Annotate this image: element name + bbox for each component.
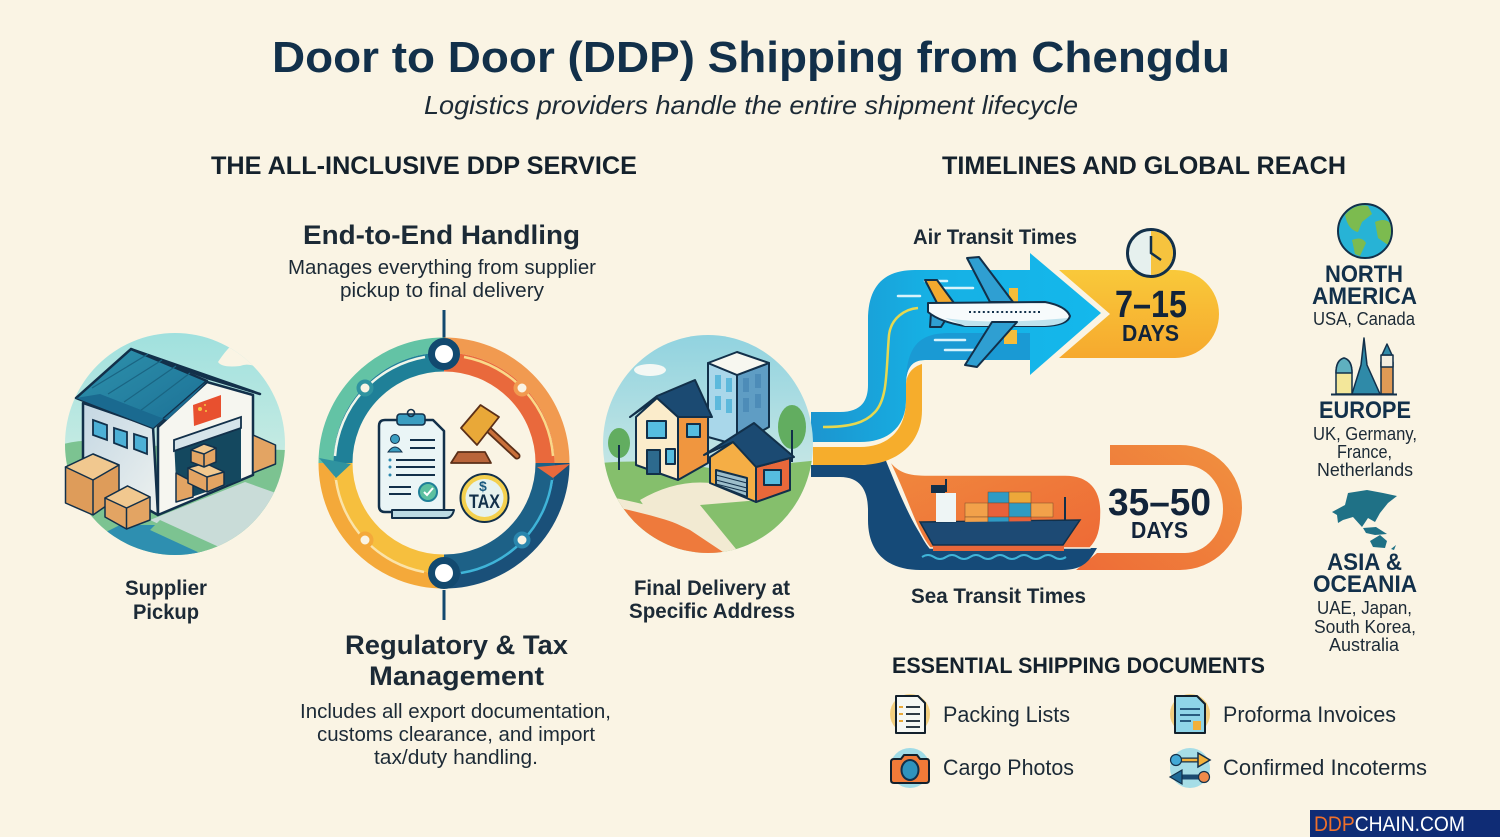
roof [76, 349, 207, 428]
flow ribbon: sea route and C-shaped pill [811, 445, 1242, 570]
icon: tax coin: TAX [469, 492, 500, 513]
document item: confirmed incoterms: Confirmed Incoterms [1223, 755, 1427, 780]
small house with garage [704, 423, 794, 502]
region: north america [1312, 261, 1417, 329]
label: supplier pickup: Pickup [133, 601, 199, 624]
tower [708, 352, 769, 445]
text block: regulatory and tax management [300, 630, 611, 769]
heading: timelines and reach: TIMELINES AND GLOBAL REACH [942, 152, 1346, 180]
region: asia and oceania: South Korea, [1314, 617, 1416, 637]
icon: airplane [925, 257, 1070, 367]
text block: regulatory and tax management: Management [369, 661, 544, 691]
region: europe: Netherlands [1317, 460, 1413, 480]
days pill: air: 7–15 [1115, 284, 1187, 326]
icon: globe [1338, 204, 1395, 258]
region: north america: USA, Canada [1313, 309, 1416, 329]
icon: european landmarks [1331, 338, 1397, 394]
text block: regulatory and tax management: customs clearance, and import [317, 724, 595, 746]
brand badge: DDPCHAIN.COM [1314, 813, 1465, 836]
document item: cargo photos: Cargo Photos [943, 755, 1074, 780]
title: Door to Door (DDP) Shipping from Chengdu [272, 33, 1230, 82]
region: europe: UK, Germany, [1313, 424, 1417, 444]
text block: regulatory and tax management: Regulatory & Tax [345, 630, 568, 660]
text block: end-to-end handling: End-to-End Handling [303, 220, 580, 250]
text block: regulatory and tax management: Includes all export documentation, [300, 701, 611, 723]
icon: warehouse at supplier [64, 333, 285, 555]
text block: end-to-end handling: pickup to final delivery [340, 280, 544, 302]
trees [608, 428, 630, 458]
region: asia and oceania [1313, 549, 1417, 655]
label: final delivery: Final Delivery at [634, 577, 790, 600]
region: europe [1313, 397, 1417, 480]
text block: end-to-end handling: Manages everything from supplier [288, 257, 596, 279]
days pill: air [1059, 270, 1219, 358]
region: asia and oceania: Australia [1329, 635, 1400, 655]
label: supplier pickup: Supplier [125, 577, 207, 600]
subtitle: Logistics providers handle the entire shipment lifecycle [424, 90, 1078, 120]
label: supplier pickup [125, 577, 207, 624]
region: asia and oceania: OCEANIA [1313, 571, 1417, 598]
document item: proforma invoices: Proforma Invoices [1223, 702, 1396, 727]
days label: sea: DAYS [1131, 517, 1188, 543]
region: asia and oceania: UAE, Japan, [1317, 598, 1412, 618]
icon: gavel [451, 405, 517, 463]
icon: container ship [920, 479, 1080, 559]
label: final delivery: Specific Address [629, 600, 795, 623]
flow ribbon: yellow connector [813, 364, 922, 465]
document item: packing lists: Packing Lists [943, 702, 1070, 727]
region: europe: France, [1337, 442, 1392, 462]
region: north america: AMERICA [1312, 283, 1417, 310]
text block: end-to-end handling [288, 220, 596, 302]
document item: cargo photos [890, 748, 1074, 788]
label: final delivery [629, 577, 795, 623]
warehouse walls [83, 403, 158, 515]
circular process ring [319, 310, 570, 620]
days label: sea [1108, 482, 1211, 543]
label: air transit: Air Transit Times [913, 226, 1077, 249]
label: sea transit: Sea Transit Times [911, 585, 1086, 608]
icon: houses at final delivery [600, 330, 820, 560]
region: europe: EUROPE [1319, 397, 1411, 424]
document item: proforma invoices [1170, 694, 1396, 734]
days pill: air: DAYS [1122, 320, 1179, 346]
document item: confirmed incoterms [1170, 748, 1427, 788]
text block: regulatory and tax management: tax/duty handling. [374, 747, 538, 769]
flag [193, 395, 221, 426]
icon: tax coin [460, 474, 508, 522]
flow ribbon: air route arrow [811, 253, 1101, 442]
heading: essential documents: ESSENTIAL SHIPPING DOCUMENTS [892, 653, 1265, 678]
icon: asia map [1332, 490, 1397, 550]
icon: clipboard document [379, 410, 454, 518]
icon: tax coin: $ [479, 478, 487, 494]
region: asia and oceania: ASIA & [1327, 549, 1402, 576]
windows [93, 420, 147, 454]
days label: sea: 35–50 [1108, 482, 1211, 524]
door [174, 417, 241, 502]
region: north america: NORTH [1325, 261, 1403, 288]
icon: clock [1128, 230, 1174, 276]
document item: packing lists [890, 694, 1070, 734]
main house [630, 380, 712, 480]
heading: all-inclusive service: THE ALL-INCLUSIVE DDP SERVICE [211, 152, 637, 180]
